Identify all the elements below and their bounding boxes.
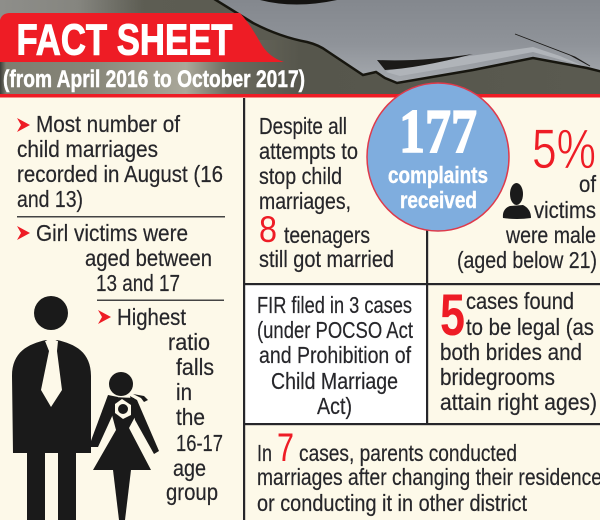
bullet: girl victims: 13 and 17 bbox=[96, 270, 180, 296]
panel: changed residence: cases, parents conducted bbox=[299, 440, 517, 466]
panel: FIR filed bbox=[257, 292, 413, 419]
callout: 177 complaints circle bbox=[367, 83, 509, 231]
bullet: highest ratio: 16-17 bbox=[176, 430, 223, 456]
header photo strip bbox=[0, 0, 600, 95]
panel: changed residence bbox=[257, 426, 600, 516]
panel: left column facts bbox=[17, 111, 225, 505]
red number 5: 5 bbox=[440, 283, 465, 348]
red rule under header bbox=[0, 94, 600, 98]
panel: male victims: of bbox=[579, 171, 597, 197]
callout: 177 complaints circle: 177 bbox=[399, 98, 477, 166]
panel: teenagers married: attempts to bbox=[259, 138, 358, 164]
panel: teenagers married bbox=[259, 113, 394, 272]
red title banner bbox=[0, 13, 284, 64]
bullet: most marriages: and 13) bbox=[17, 186, 83, 212]
bullet: highest ratio: in bbox=[176, 379, 192, 405]
bullet: highest ratio: ratio bbox=[168, 329, 210, 355]
panel: teenagers married: stop child bbox=[259, 163, 342, 189]
man bbox=[12, 296, 91, 520]
callout: 177 complaints circle: complaints bbox=[388, 162, 488, 188]
panel: teenagers married: Despite all bbox=[259, 113, 347, 139]
panel: legal cases: bridegrooms bbox=[440, 364, 555, 390]
panel: changed residence: In bbox=[257, 440, 272, 466]
panel: teenagers married: marriages, bbox=[259, 188, 351, 214]
bullet: girl victims: Girl victims were bbox=[36, 220, 188, 246]
bullet: highest ratio bbox=[98, 304, 223, 505]
bullet: highest ratio: falls bbox=[176, 354, 214, 380]
panel: legal cases bbox=[440, 283, 597, 415]
bullet: girl victims bbox=[17, 220, 212, 296]
panel: FIR cell background bbox=[245, 285, 427, 423]
panel: legal cases: both brides and bbox=[440, 339, 582, 365]
icon: male person bbox=[503, 183, 531, 219]
icon: man and girl silhouette bbox=[12, 296, 159, 520]
bullet: most marriages: Most number of bbox=[36, 111, 181, 137]
bullet: most marriages bbox=[17, 111, 223, 212]
red number 7: 7 bbox=[277, 426, 294, 470]
title: FACT SHEET bbox=[16, 16, 233, 64]
panel: FIR filed: Child Marriage bbox=[271, 368, 398, 394]
subtitle: date range: (from April 2016 to October 2017) bbox=[3, 66, 305, 93]
girl bbox=[89, 372, 159, 520]
bullet: girl victims: aged between bbox=[85, 245, 212, 271]
panel: legal cases: cases found bbox=[466, 288, 574, 314]
panel: teenagers married: teenagers bbox=[284, 222, 370, 248]
bullet: highest ratio: Highest bbox=[117, 304, 187, 330]
panel: FIR filed: and Prohibition of bbox=[259, 342, 412, 368]
bullet: highest ratio: group bbox=[166, 479, 218, 505]
red number 8: 8 bbox=[259, 209, 277, 250]
panel: FIR filed: FIR filed in 3 cases bbox=[257, 292, 412, 318]
panel: changed residence: or conducting it in other district bbox=[257, 490, 528, 516]
bullet: highest ratio: age bbox=[173, 455, 206, 481]
panel: male victims bbox=[457, 117, 597, 273]
bullet: most marriages: child marriages bbox=[17, 136, 158, 162]
bullet: most marriages: recorded in August (16 bbox=[17, 161, 223, 187]
panel: FIR filed: (under POCSO Act bbox=[257, 317, 413, 343]
panel: teenagers married: still got married bbox=[259, 246, 394, 272]
grid lines bbox=[243, 98, 600, 520]
panel: FIR filed: Act) bbox=[317, 393, 352, 419]
callout: 177 complaints circle: received bbox=[400, 187, 477, 213]
bullet: highest ratio: the bbox=[176, 404, 205, 430]
